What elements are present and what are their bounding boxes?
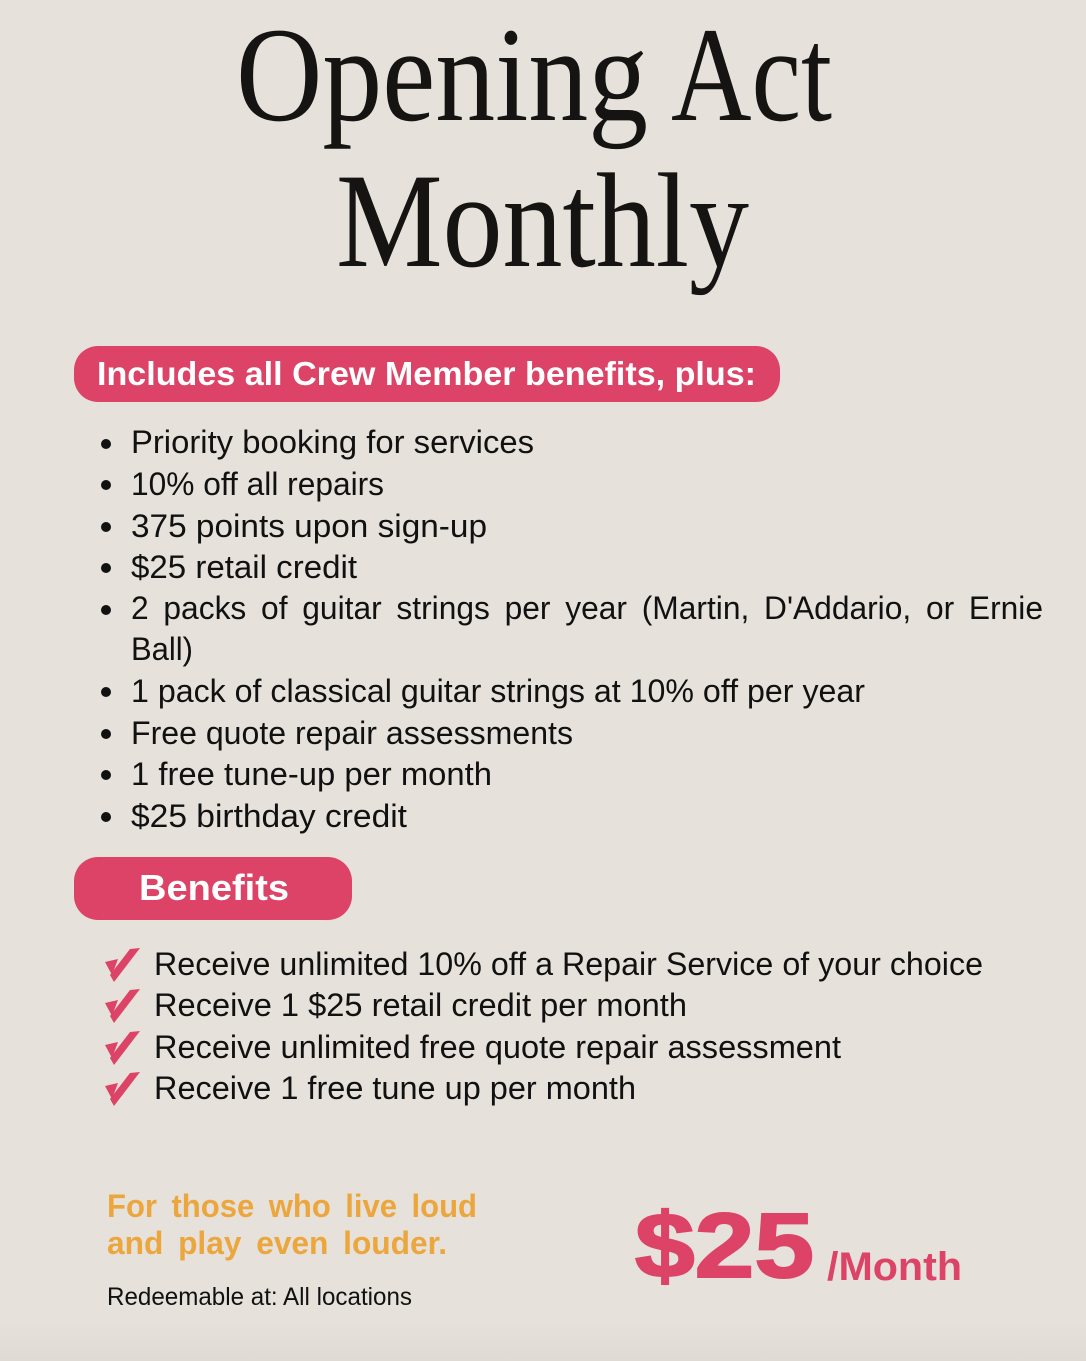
benefits checklist: Receive unlimited 10% off a Repair Service of your choice xyxy=(154,946,983,982)
bullet list: 1 pack of classical guitar strings at 10% off per year xyxy=(131,673,865,709)
heading pill: includes: Includes all Crew Member benefits, plus: xyxy=(97,355,756,392)
bullet list: Free quote repair assessments xyxy=(131,715,573,751)
benefits checklist: Receive 1 $25 retail credit per month xyxy=(154,987,687,1023)
benefits checklist: Receive unlimited free quote repair assessment xyxy=(154,1029,841,1065)
bullet list: 10% off all repairs xyxy=(131,466,384,502)
bullet list: Ball) xyxy=(131,631,193,667)
bullet list: $25 retail credit xyxy=(131,549,357,585)
title xyxy=(236,1,832,296)
heading pill: benefits xyxy=(74,857,352,920)
bullet list: 375 points upon sign-up xyxy=(131,508,487,544)
bullet list: $25 birthday credit xyxy=(131,798,407,834)
title: Monthly xyxy=(336,147,749,296)
heading pill: includes xyxy=(74,346,780,402)
bullet list: 2 packs of guitar strings per year (Martin, D'Addario, or Ernie xyxy=(131,590,1043,626)
icon: check mark xyxy=(105,1031,140,1065)
title: Opening xyxy=(236,1,648,150)
heading pill: benefits: Benefits xyxy=(139,867,289,908)
bullet list: 1 free tune-up per month xyxy=(131,756,492,792)
icon: check mark xyxy=(105,1072,140,1106)
price xyxy=(635,1195,962,1297)
tagline xyxy=(107,1188,477,1261)
redeemable note: Redeemable at: All locations xyxy=(107,1283,412,1311)
bullet list: Priority booking for services xyxy=(131,424,534,460)
icon: check mark xyxy=(105,948,140,982)
benefits checklist: Receive 1 free tune up per month xyxy=(154,1070,636,1106)
bullet list xyxy=(101,424,1043,834)
price: $25 xyxy=(635,1195,814,1297)
benefits checklist xyxy=(105,946,983,1106)
price: /Month xyxy=(827,1245,962,1289)
tagline: and play even louder. xyxy=(107,1225,447,1261)
title: Act xyxy=(671,1,832,150)
icon: check mark xyxy=(105,989,140,1023)
tagline: For those who live loud xyxy=(107,1188,477,1224)
